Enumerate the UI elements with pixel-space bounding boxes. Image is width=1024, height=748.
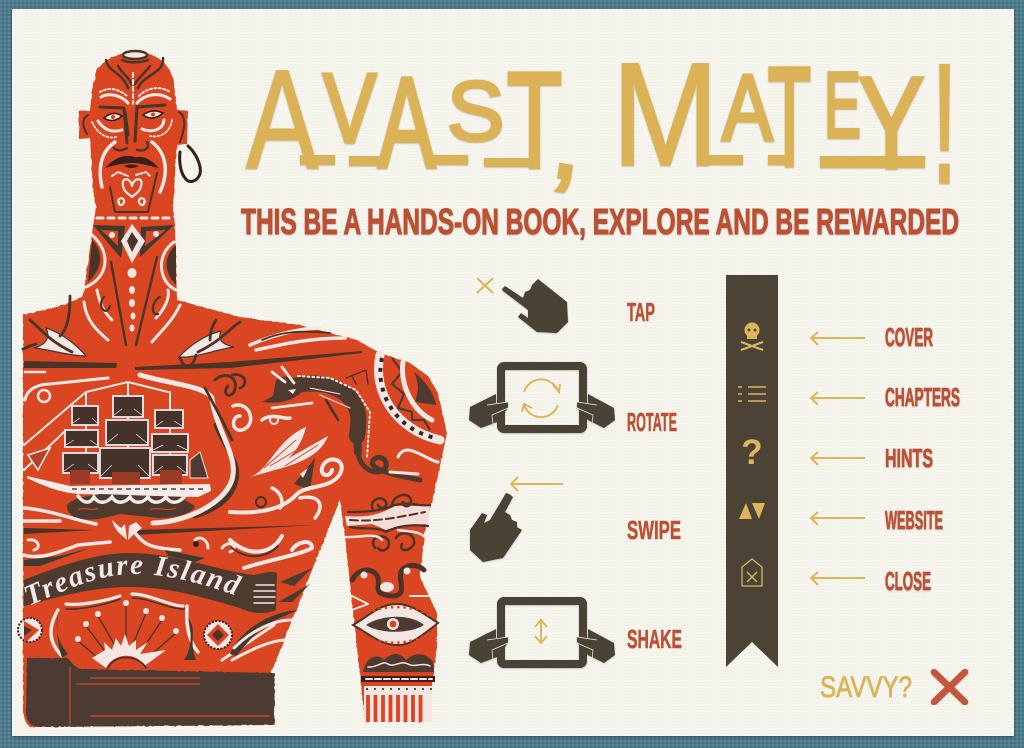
icon: chapter list: [738, 387, 766, 401]
arm cuff: [364, 686, 432, 722]
chin panel: [110, 173, 157, 212]
title: Avast, Matey!: M: [612, 33, 719, 197]
ribbon labels: CLOSE: [885, 566, 931, 596]
arm band: [345, 506, 430, 530]
arm face: [352, 565, 424, 596]
title: Avast, Matey!: V: [323, 53, 377, 163]
arm eye: [353, 604, 438, 645]
title: Avast, Matey!: !: [932, 28, 957, 218]
treasure island banner: Treasure Island: [24, 556, 243, 605]
icon: close house: [742, 559, 762, 586]
arm tattoos: [345, 495, 438, 722]
hull: [27, 476, 211, 497]
eyebrows: [101, 95, 170, 103]
eyes: [104, 111, 163, 121]
brow and nose bars: [100, 105, 165, 143]
small rear sails: [28, 448, 50, 470]
figure silhouette: [23, 52, 447, 727]
ribbon labels: WEBSITE: [885, 505, 943, 535]
icon: question mark: ?: [741, 433, 763, 472]
arm waves: [363, 654, 434, 672]
icon: tablet held in hands: [469, 601, 615, 664]
tall ship: [24, 382, 211, 540]
necklace: [97, 216, 174, 220]
nose: [114, 142, 148, 150]
icon: tap mark: [477, 278, 493, 293]
earring: [180, 146, 200, 181]
label: shake: SHAKE: [627, 624, 682, 654]
rotate gesture: [469, 366, 677, 437]
icon: swiping hand: [470, 493, 522, 562]
title: Avast, Matey!: S: [447, 65, 504, 159]
rigging: [24, 382, 170, 480]
chest lines: [24, 351, 362, 535]
arrows to ribbon icons: [811, 332, 865, 585]
face tattoos: [83, 51, 184, 212]
side whiskers: [100, 142, 165, 192]
icon: tapping hand: [502, 279, 568, 333]
title: Avast, Matey!: T: [768, 40, 811, 195]
title: Avast, Matey!: A: [378, 52, 435, 195]
title: Avast, Matey!: ,: [546, 77, 593, 203]
arrow: swipe: [511, 477, 563, 491]
neck tattoos: [84, 218, 180, 345]
shoulder tattoo: [378, 355, 440, 462]
neck dots: [128, 268, 136, 332]
title feet: [300, 155, 925, 168]
icon: rotate arrows: [522, 379, 560, 417]
title: Avast, Matey!: E: [824, 54, 861, 158]
ribbon labels: [885, 322, 960, 596]
icon: website logo: [739, 503, 765, 519]
text: ROTATE: [627, 407, 677, 437]
neck lines: [111, 257, 157, 345]
centre flourish: [112, 520, 142, 540]
dragon: [262, 367, 420, 480]
ribbon labels: CHAPTERS: [885, 382, 960, 412]
ribbon: [726, 275, 778, 667]
title: Avast, Matey!: [246, 28, 957, 218]
shake gesture: [469, 601, 682, 664]
sails: [63, 396, 188, 478]
ears: [83, 112, 184, 142]
close button: [934, 672, 965, 702]
illustration: tattooed pirate figure: [17, 50, 447, 728]
label: tap: TAP: [627, 297, 655, 327]
swipe gesture: [470, 477, 681, 562]
forehead mark: [123, 51, 147, 59]
title: Avast, Matey!: A: [246, 40, 318, 198]
title: Avast, Matey!: A: [722, 56, 773, 161]
ribbon labels: COVER: [885, 322, 933, 352]
belt: [26, 658, 275, 727]
sail shading: [64, 409, 187, 476]
moustache: [105, 156, 159, 168]
title: Avast, Matey!: Y: [858, 50, 925, 196]
tap gesture: [477, 278, 655, 333]
navigation ribbon: [726, 275, 778, 667]
ribbon labels: HINTS: [885, 443, 933, 473]
wing and scroll tattoos: [230, 405, 342, 660]
label: swipe: SWIPE: [627, 515, 681, 545]
icon: tablet held in hands: [469, 366, 615, 429]
title: Avast, Matey!: T: [507, 46, 562, 196]
collar: [93, 225, 174, 258]
icon: shake arrow: [535, 620, 547, 643]
icon: skull and crossbones: [741, 322, 763, 350]
savvy prompt: SAVVY?: [820, 671, 912, 704]
swallow tattoos: [23, 296, 345, 357]
waves: [67, 494, 195, 520]
scroll flourishes above banner: [24, 534, 234, 566]
cheek marks: [98, 120, 164, 131]
fan and rising sun: [18, 594, 274, 668]
